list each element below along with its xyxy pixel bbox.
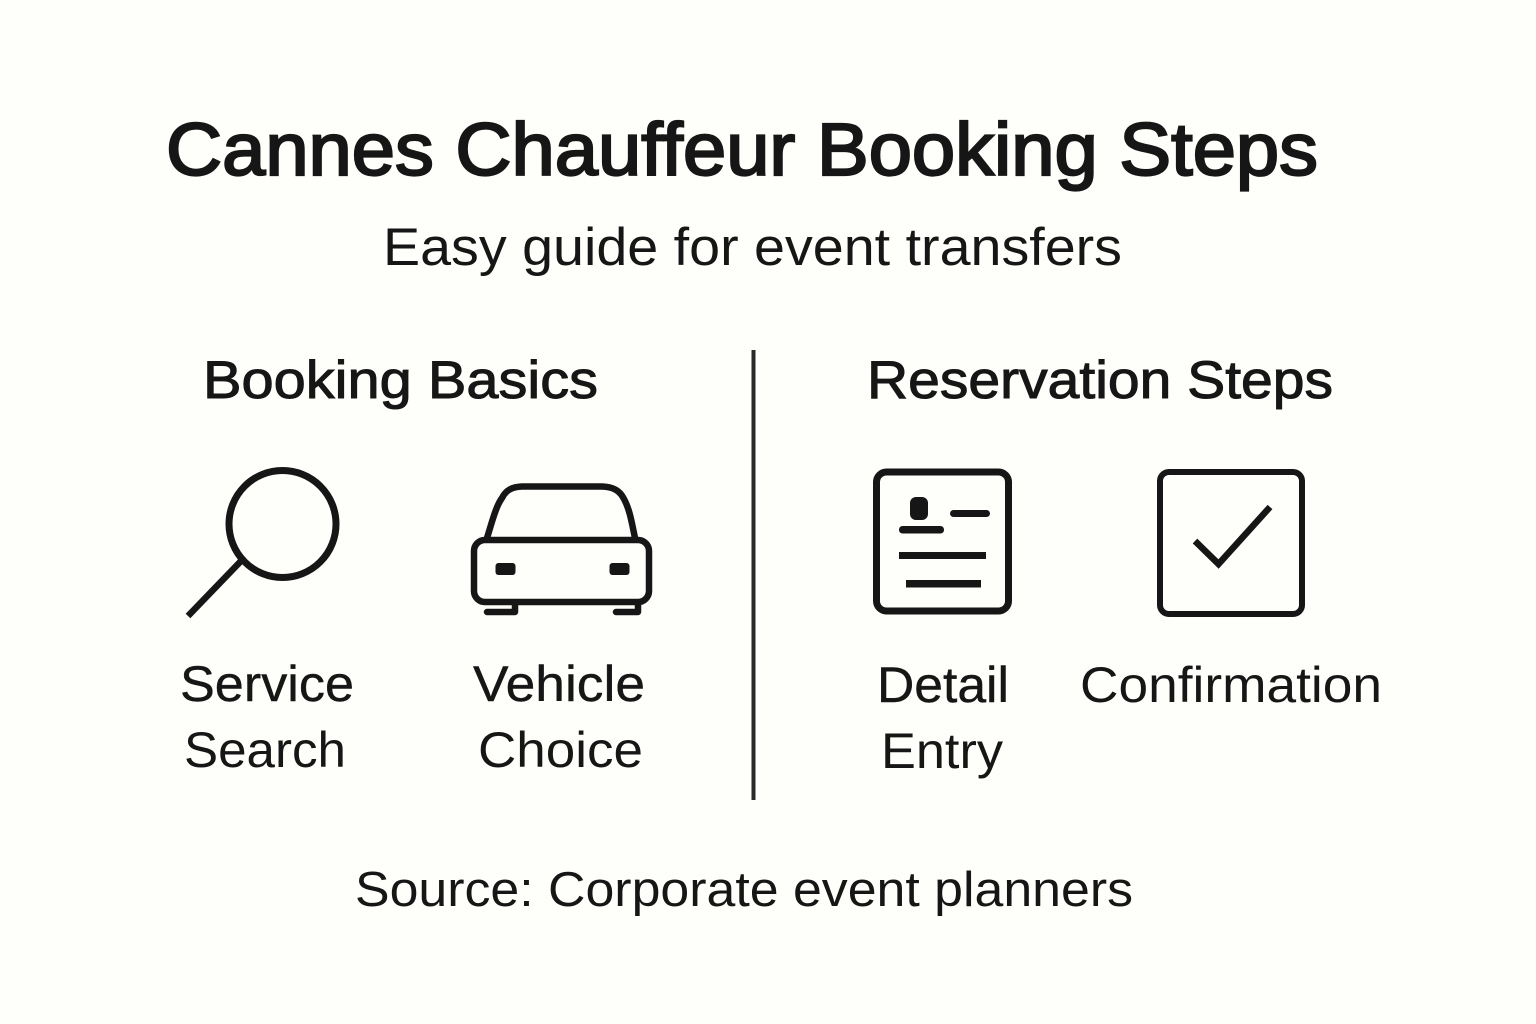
- label: vehicle choice: [473, 656, 645, 778]
- icon: car: [474, 486, 649, 612]
- label: vehicle choice: Choice: [478, 722, 643, 778]
- heading: reservation steps: Reservation Steps: [867, 351, 1333, 410]
- label: detail entry: Detail: [877, 657, 1009, 713]
- label: detail entry: Entry: [881, 723, 1003, 779]
- source note: Source: Corporate event planners: [355, 863, 1133, 917]
- title: Cannes Chauffeur Booking Steps: [166, 108, 1318, 191]
- label: service search: Search: [184, 722, 346, 778]
- heading: booking basics: Booking Basics: [203, 351, 598, 410]
- divider between sections: [752, 350, 756, 800]
- label: service search: [180, 656, 354, 778]
- label: service search: Service: [180, 656, 354, 712]
- label: confirmation: Confirmation: [1080, 657, 1382, 713]
- subtitle: Easy guide for event transfers: [383, 218, 1122, 277]
- icon: magnifying glass: [188, 470, 336, 616]
- icon: detail form: [876, 472, 1008, 611]
- icon: confirmation checkbox: [1160, 472, 1302, 614]
- label: detail entry: [877, 657, 1009, 779]
- label: vehicle choice: Vehicle: [473, 656, 645, 712]
